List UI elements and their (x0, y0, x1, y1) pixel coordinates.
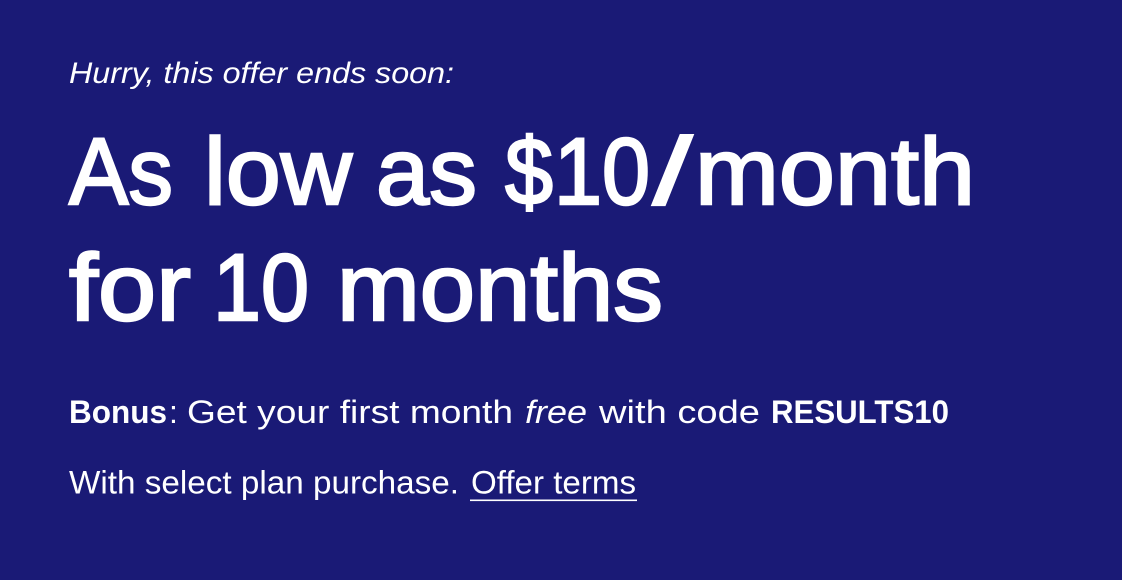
bonus line: Get your first month (187, 394, 513, 430)
bonus line: Bonus (69, 394, 167, 430)
bonus line: free (525, 394, 587, 430)
headline: As (69, 119, 173, 225)
headline: 10 (554, 119, 650, 225)
bonus line (69, 394, 949, 430)
headline: 10 (213, 235, 309, 341)
headline (69, 119, 975, 341)
headline: / (653, 119, 693, 225)
headline: as (376, 119, 477, 225)
headline: low (204, 119, 352, 225)
headline: $ (505, 119, 553, 225)
fine print: With select plan purchase. (69, 464, 459, 500)
bonus line: : (169, 394, 178, 430)
headline: months (337, 235, 663, 341)
offer terms link: Offer terms (471, 464, 636, 500)
bonus line: with code (598, 394, 760, 430)
urgency line: Hurry, this offer ends soon: (69, 57, 454, 90)
bonus line: RESULTS10 (771, 394, 949, 430)
headline: month (695, 119, 975, 225)
headline: for (69, 235, 191, 341)
